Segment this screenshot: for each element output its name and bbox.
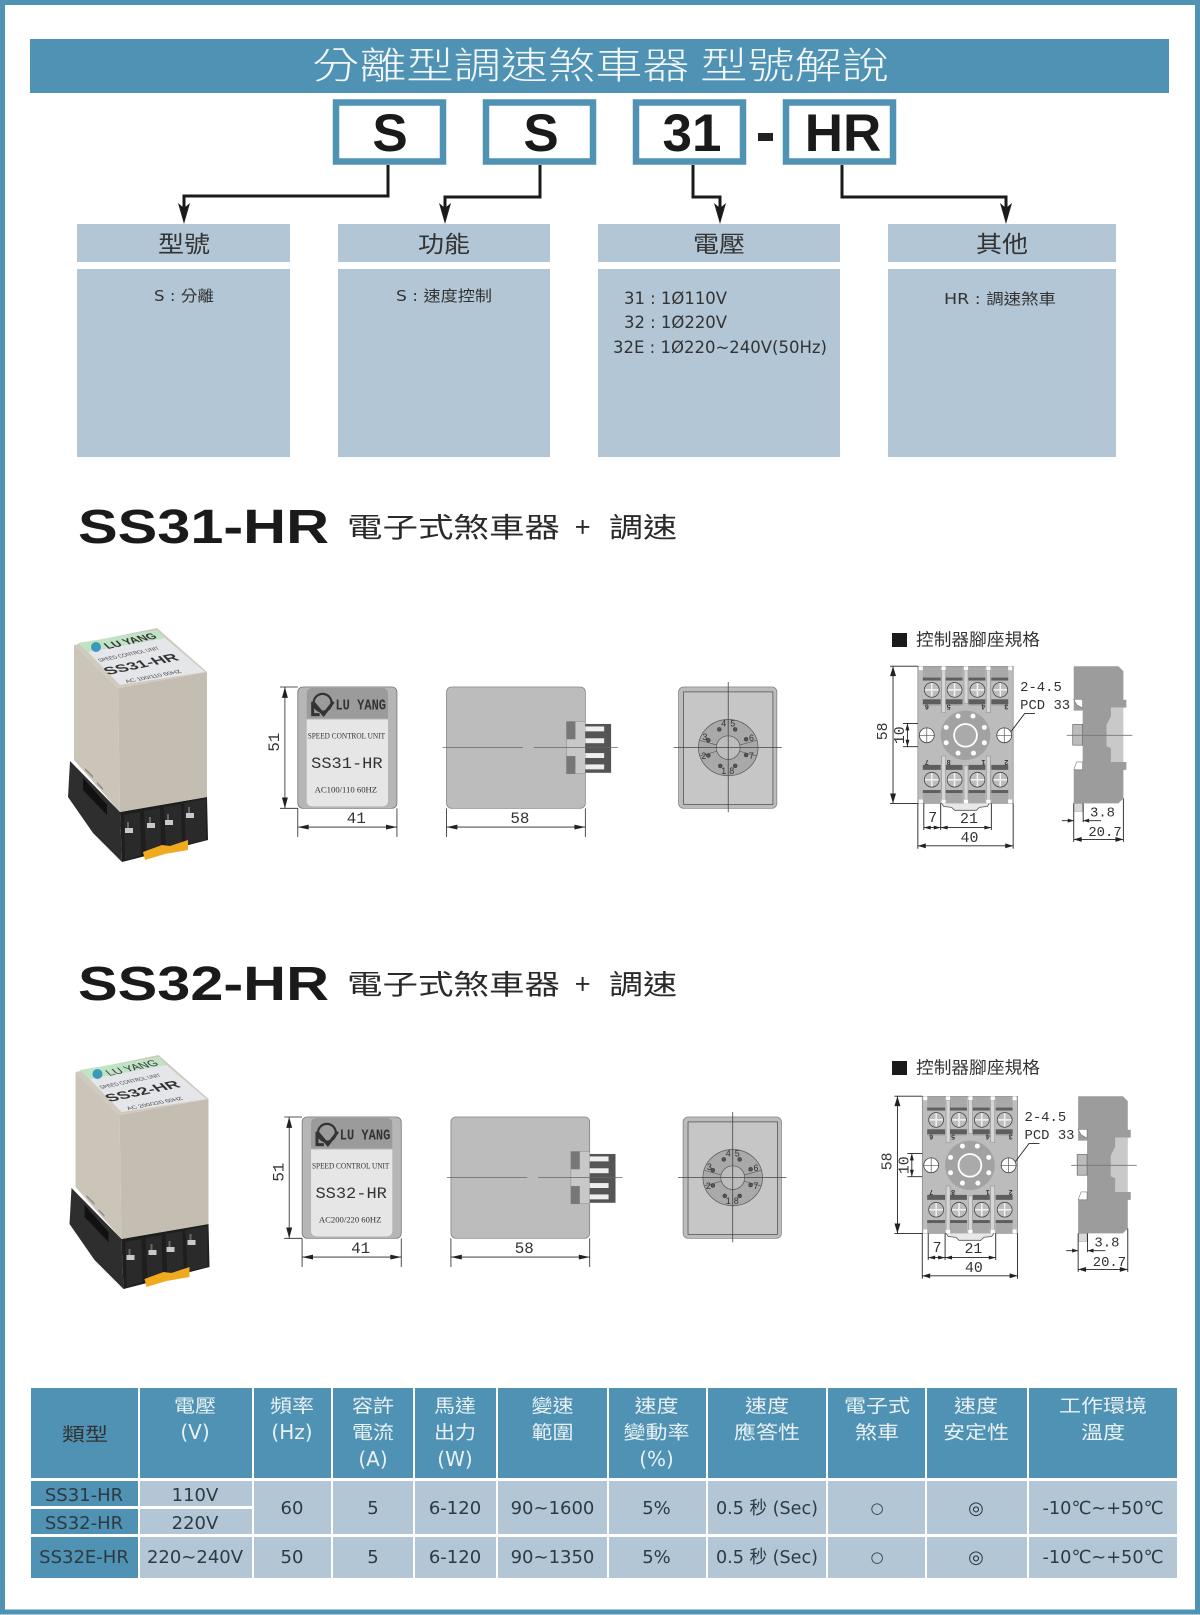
table header row: 煞車	[855, 1419, 899, 1445]
connector arrows	[178, 165, 1012, 224]
table body: 0.5 秒 (Sec)	[716, 1547, 818, 1568]
table header row: 頻率	[270, 1392, 314, 1418]
table body: -10℃~+50℃	[1042, 1547, 1164, 1568]
arrow to model	[178, 165, 388, 224]
socket drawing 2: 3	[1009, 1133, 1013, 1140]
front drawing SS32-HR	[270, 1117, 401, 1267]
panel: model: 型號	[158, 225, 210, 259]
socket drawing: 58	[876, 722, 892, 740]
arrow to other	[842, 165, 1012, 224]
bottom view SS32-HR: 4	[726, 1148, 731, 1158]
table body: SS32-HR	[45, 1513, 123, 1534]
table body: 5	[367, 1498, 379, 1519]
socket drawing: 4	[981, 703, 985, 710]
product photo SS32-HR	[70, 1055, 210, 1289]
product photo SS32-HR: SS32-HR	[102, 1079, 185, 1105]
heading: SS31-HR: 電子式煞車器	[347, 505, 560, 545]
panel: model: S : 分離	[154, 287, 214, 305]
front drawing SS31-HR: 41	[347, 810, 366, 828]
bottom view SS32-HR: 1	[726, 1196, 731, 1206]
product photo SS32-HR: LU YANG	[102, 1058, 161, 1078]
heading: SS32-HR: SS32-HR	[78, 958, 329, 1011]
socket drawing: 2	[1004, 758, 1008, 765]
bottom view SS31-HR: 6	[749, 733, 754, 743]
socket drawing: 6	[925, 703, 929, 710]
product photo SS31-HR: SPEED CONTROL UNIT	[97, 646, 161, 663]
product photo SS32-HR: SPEED CONTROL UNIT	[98, 1073, 163, 1090]
table body: 60	[281, 1498, 303, 1519]
panel: voltage	[598, 224, 840, 457]
table body: 90~1350	[511, 1547, 594, 1568]
socket drawing 2: 4	[986, 1133, 990, 1140]
socket drawing 2: 5	[951, 1133, 955, 1140]
bottom view SS31-HR: 4	[721, 718, 726, 728]
socket drawing 2: 40	[965, 1261, 983, 1277]
heading: SS32-HR: 調速	[609, 962, 677, 1002]
product photo SS31-HR: LU YANG	[101, 631, 160, 651]
panel: voltage: 32 : 1Ø220V	[624, 313, 728, 332]
socket drawing: 3.8	[1090, 806, 1115, 822]
code box S: S	[372, 104, 408, 163]
panel: other: 其他	[976, 225, 1028, 259]
front drawing SS31-HR: SS31-HR	[311, 755, 383, 773]
bottom view SS31-HR: 3	[702, 732, 707, 742]
heading: SS31-HR	[78, 501, 677, 554]
code box S function	[486, 102, 593, 163]
table body: 5%	[642, 1547, 671, 1568]
product photo SS31-HR	[68, 628, 208, 862]
table body: 110V	[172, 1485, 219, 1506]
table header row: 容許	[352, 1392, 394, 1418]
socket drawing: 7	[928, 811, 937, 827]
table body: -10℃~+50℃	[1042, 1498, 1164, 1519]
front drawing SS31-HR	[266, 687, 397, 837]
table body: 90~1600	[511, 1498, 594, 1519]
bottom view SS32-HR: 7	[754, 1181, 759, 1191]
panel: voltage: 電壓	[693, 225, 745, 259]
table body: 220~240V	[147, 1547, 244, 1568]
bottom view SS31-HR: 7	[749, 751, 754, 761]
table body: SS32E-HR	[39, 1547, 129, 1568]
socket drawing: 40	[961, 831, 978, 847]
code box S	[336, 102, 443, 163]
bottom view SS32-HR: 3	[707, 1162, 712, 1172]
front drawing SS31-HR: AC100/110 60HZ	[315, 785, 377, 795]
socket spec label: 控制器腳座規格	[916, 626, 1040, 650]
specification table	[31, 1388, 1177, 1578]
arrow to voltage	[693, 165, 726, 224]
table body	[31, 1481, 1177, 1578]
socket drawing 2: 8	[951, 1188, 955, 1195]
socket spec label 2: 控制器腳座規格	[916, 1054, 1040, 1078]
panel: voltage: 32E : 1Ø220~240V(50Hz)	[613, 338, 827, 357]
bottom view SS32-HR: 2	[706, 1181, 711, 1191]
table header row	[31, 1388, 1177, 1478]
socket drawing: 5	[947, 703, 951, 710]
socket drawing: 20.7	[1088, 825, 1122, 841]
table header row: 速度	[954, 1392, 998, 1418]
front drawing SS32-HR: SPEED CONTROL UNIT	[312, 1160, 390, 1170]
table body: ◎	[968, 1498, 984, 1519]
table body: ○	[870, 1548, 884, 1566]
table header row: (W)	[437, 1447, 473, 1471]
front drawing SS31-HR: SPEED CONTROL UNIT	[308, 730, 385, 740]
socket drawing 2: 7	[929, 1188, 933, 1195]
side drawing SS32-HR	[447, 1117, 622, 1267]
socket drawing: PCD 33	[1020, 698, 1070, 714]
socket drawing 2: 10	[897, 1156, 913, 1174]
front drawing SS32-HR: LU YANG	[340, 1129, 390, 1145]
panel: function: 功能	[418, 225, 470, 259]
socket drawing 2: 3.8	[1094, 1236, 1119, 1252]
socket drawing 2: PCD 33	[1025, 1128, 1075, 1144]
socket drawing 2: 20.7	[1093, 1255, 1126, 1271]
panel: function	[338, 224, 550, 457]
table header row: 範圍	[532, 1419, 574, 1445]
table header row: (%)	[639, 1447, 674, 1471]
table header row: (A)	[358, 1447, 388, 1471]
side drawing SS31-HR: 58	[510, 810, 529, 828]
table header row: 電流	[352, 1419, 394, 1445]
bottom view SS31-HR: 8	[729, 766, 734, 776]
bottom view SS32-HR	[678, 1112, 786, 1242]
table header row: 變速	[532, 1392, 574, 1418]
table body: SS31-HR	[45, 1485, 123, 1506]
code box HR	[786, 102, 893, 163]
front drawing SS32-HR: 51	[270, 1163, 288, 1182]
panel: other: HR : 調速煞車	[944, 290, 1056, 308]
panel: other	[888, 224, 1116, 457]
product photo SS31-HR: SS31-HR	[100, 652, 183, 678]
title banner	[30, 36, 1169, 93]
product photo SS31-HR: AC 100/110 60HZ	[124, 669, 183, 684]
code box 31: 31	[663, 104, 721, 163]
table body: 6-120	[429, 1498, 481, 1519]
socket drawing: 21	[960, 812, 978, 828]
table header row: 應答性	[734, 1419, 800, 1445]
socket drawing 2: 2	[1009, 1188, 1013, 1195]
table header row: 工作環境	[1059, 1392, 1147, 1418]
dash	[758, 133, 773, 141]
front drawing SS32-HR: AC200/220 60HZ	[319, 1215, 381, 1225]
socket drawing: 10	[893, 726, 909, 744]
socket drawing: 7	[925, 758, 929, 765]
bottom view SS31-HR: 1	[721, 766, 726, 776]
table header row: 電子式	[844, 1392, 910, 1418]
table body: ○	[870, 1499, 884, 1517]
heading: SS31-HR: +	[575, 505, 590, 545]
panel: model	[77, 224, 290, 457]
bottom view SS32-HR: 8	[734, 1196, 739, 1206]
table body: 50	[281, 1547, 303, 1568]
arrow to function	[439, 165, 540, 224]
table body: 6-120	[429, 1547, 481, 1568]
code box S function: S	[523, 104, 559, 163]
table header row: 速度	[634, 1392, 678, 1418]
socket drawing 2: 1	[986, 1188, 990, 1195]
table header row: 變動率	[624, 1419, 690, 1445]
title banner: 分離型調速煞車器 型號解說	[312, 36, 889, 90]
model code boxes	[336, 102, 893, 163]
table body: 5%	[642, 1498, 671, 1519]
socket drawing 2	[880, 1096, 1137, 1279]
front drawing SS32-HR: SS32-HR	[315, 1185, 387, 1203]
heading: SS32-HR: 電子式煞車器	[347, 962, 560, 1002]
panel: function: S : 速度控制	[396, 287, 492, 305]
socket drawing 2: 58	[880, 1152, 896, 1170]
table header row: 速度	[745, 1392, 789, 1418]
table body: ◎	[968, 1547, 984, 1568]
front drawing SS32-HR: 41	[351, 1240, 370, 1258]
side drawing SS31-HR	[443, 687, 618, 837]
panel: voltage: 31 : 1Ø110V	[624, 289, 728, 308]
code box HR: HR	[805, 104, 881, 163]
heading: SS32-HR	[78, 958, 677, 1011]
socket drawing: 2-4.5	[1020, 680, 1062, 696]
side drawing SS32-HR: 58	[515, 1240, 534, 1258]
front drawing SS31-HR: 51	[266, 733, 284, 752]
bottom view SS31-HR: 5	[730, 718, 735, 728]
front drawing SS31-HR: LU YANG	[335, 699, 386, 715]
table header row: (Hz)	[271, 1420, 313, 1444]
socket drawing 2: 2-4.5	[1025, 1110, 1066, 1126]
table body: 5	[367, 1547, 379, 1568]
socket drawing 2: 6	[929, 1133, 933, 1140]
table header row: 溫度	[1081, 1419, 1125, 1445]
socket drawing 2: 21	[964, 1242, 982, 1258]
bottom view SS31-HR: 2	[701, 751, 706, 761]
table header row: 類型	[62, 1421, 108, 1447]
socket drawing: 3	[1004, 703, 1008, 710]
heading: SS32-HR: +	[575, 962, 590, 1002]
product photo SS32-HR: AC 200/220 60HZ	[125, 1096, 185, 1111]
table header row: (V)	[180, 1420, 210, 1444]
socket drawing	[876, 666, 1132, 849]
table body: 220V	[172, 1513, 219, 1534]
table header row: 出力	[434, 1419, 476, 1445]
socket drawing: 8	[947, 758, 951, 765]
heading: SS31-HR: 調速	[609, 505, 677, 545]
bottom view SS32-HR: 5	[735, 1148, 740, 1158]
socket drawing: 1	[981, 758, 985, 765]
table header row: 馬達	[434, 1392, 476, 1418]
bottom view SS31-HR	[674, 682, 782, 812]
socket drawing 2: 7	[933, 1241, 942, 1257]
table body: 0.5 秒 (Sec)	[716, 1498, 818, 1519]
code box 31	[636, 102, 743, 163]
table header row: 安定性	[943, 1419, 1009, 1445]
heading: SS31-HR: SS31-HR	[78, 501, 329, 554]
table header row: 電壓	[174, 1392, 216, 1418]
bottom view SS32-HR: 6	[754, 1163, 759, 1173]
